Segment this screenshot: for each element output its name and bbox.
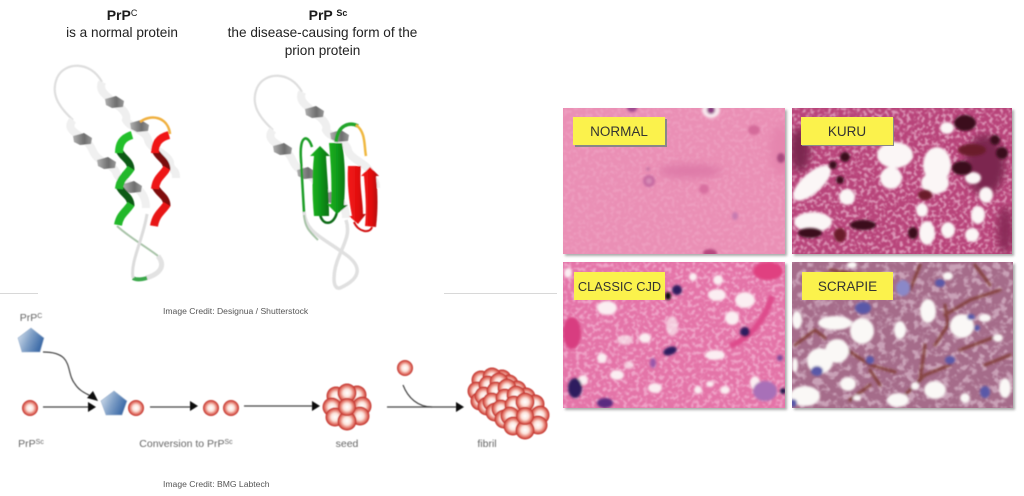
labels: fibril xyxy=(477,438,497,450)
green helix xyxy=(118,135,132,225)
arrow: PrPC curved xyxy=(43,352,98,401)
caption: image credit Designua: Image Credit: Designua / Shutterstock xyxy=(163,306,309,316)
arrow xyxy=(43,402,96,412)
tail loop xyxy=(117,214,162,280)
label PrPC: C xyxy=(37,313,42,320)
labels: PrP xyxy=(18,438,36,450)
labels: Sc xyxy=(36,439,44,446)
label: KURU: KURU xyxy=(828,124,866,139)
labels: Sc xyxy=(225,439,233,446)
diagram: normal protein PrPC xyxy=(55,66,176,280)
heading: PrP Sc: Sc xyxy=(336,8,347,18)
label: NORMAL xyxy=(573,117,667,147)
bead: monomer xyxy=(397,360,413,376)
heading: PrPC: C xyxy=(131,8,138,18)
icon: PrPC pentagon xyxy=(18,328,44,352)
panel: KURU xyxy=(787,108,1014,256)
orange link xyxy=(356,125,366,156)
label: SCRAPIE xyxy=(802,272,893,300)
text: disease-causing form: the disease-causing form of the xyxy=(228,25,417,40)
labels xyxy=(18,438,497,450)
bead: PrPSc xyxy=(22,400,38,416)
green beta strands xyxy=(310,146,330,216)
arrow: fibril growth xyxy=(387,385,464,412)
diagram: disease-causing protein PrPSc xyxy=(255,76,379,288)
labels: Conversion to PrP xyxy=(139,438,225,450)
cluster: fibril xyxy=(468,368,550,440)
green loops xyxy=(301,138,312,212)
label: NORMAL: NORMAL xyxy=(590,124,648,139)
red helix xyxy=(154,135,169,226)
heading: PrPC: PrP xyxy=(107,7,131,23)
text: disease-causing form: prion protein xyxy=(285,43,360,58)
panel: SCRAPIE xyxy=(789,262,1015,410)
label: CLASSIC CJD xyxy=(574,272,665,300)
cluster: seed xyxy=(322,384,372,430)
label: SCRAPIE: SCRAPIE xyxy=(818,279,877,294)
icon: pentagon with bead xyxy=(101,391,144,416)
beads: pair xyxy=(203,400,239,416)
panel: CLASSIC CJD xyxy=(563,262,787,410)
heading: PrP Sc: PrP xyxy=(309,7,332,23)
red beta strands xyxy=(348,166,366,224)
label: CLASSIC CJD: CLASSIC CJD xyxy=(578,279,661,294)
diagram: prion conversion pathway xyxy=(18,312,550,450)
caption: image credit BMG: Image Credit: BMG Labtech xyxy=(163,479,270,489)
label PrPC: PrP xyxy=(20,312,37,324)
orange link xyxy=(140,118,170,134)
labels: seed xyxy=(336,438,359,450)
panel: NORMAL xyxy=(563,102,790,257)
arrow xyxy=(244,401,320,411)
label: KURU xyxy=(801,117,894,146)
tail loop xyxy=(304,212,357,288)
arrow xyxy=(150,401,198,411)
text: is a normal protein: is a normal protein xyxy=(66,25,178,40)
